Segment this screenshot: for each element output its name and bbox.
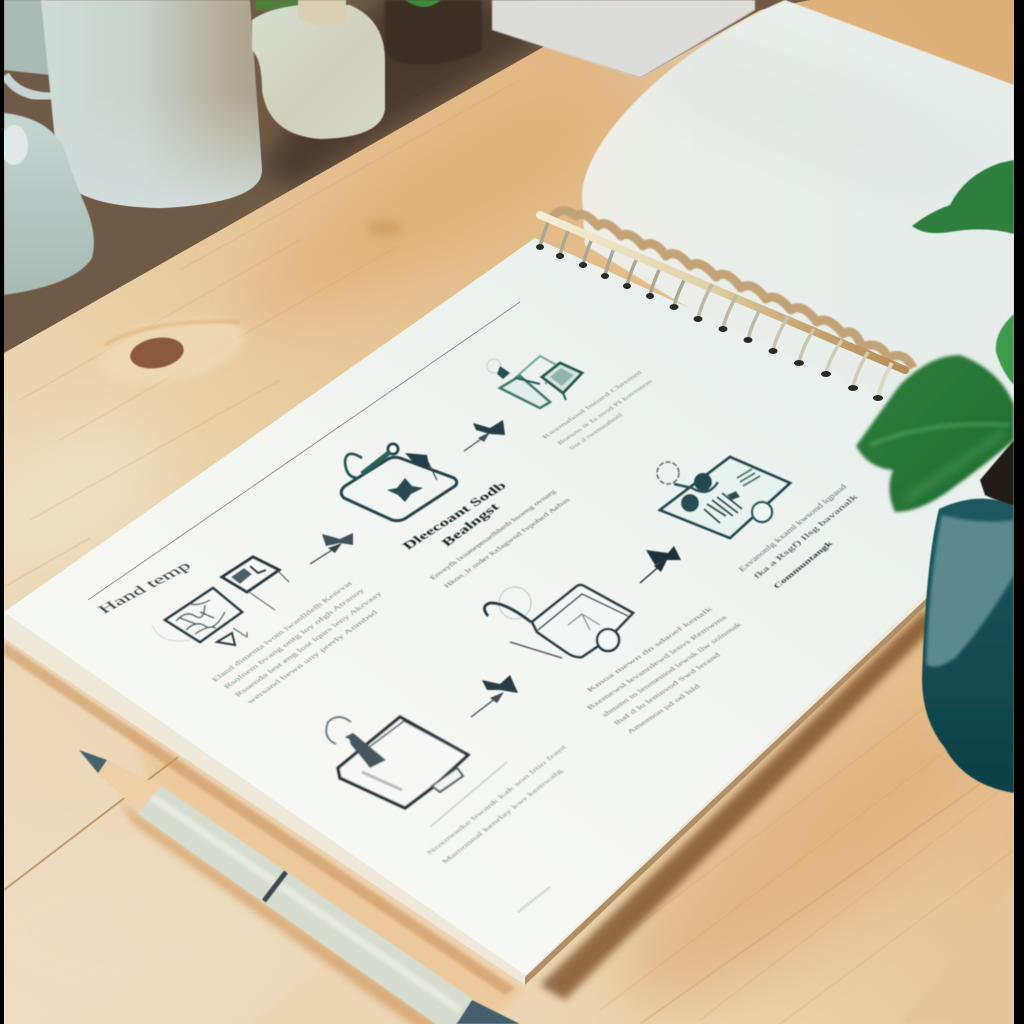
open upper notebook leaf (582, 0, 1014, 520)
paragraph: step 5 (584, 605, 744, 735)
shadow beside lower-left notebook edge (4, 642, 515, 995)
line: Communtangk (771, 539, 835, 590)
mug handle (5, 75, 56, 97)
ring 11 (768, 317, 788, 354)
title: Hand temp: Hand temp (95, 560, 195, 616)
arrow 4 (471, 675, 518, 717)
small picture frame (222, 557, 279, 592)
pencil lead (79, 750, 107, 773)
wood: seam right (640, 760, 1014, 1024)
pointer line (510, 642, 562, 658)
ring 7 (670, 277, 686, 310)
arrow shaft (640, 563, 663, 583)
notebook page right edge (525, 595, 930, 985)
line: Bxemewsl levanrdewd lenvs Remwma (584, 614, 729, 711)
arrow tip (478, 432, 490, 442)
line: Eland dimenta lvom lwanlldelh Kenrvat (209, 579, 355, 683)
vase leaf (255, 0, 345, 10)
flag line (428, 462, 437, 480)
ring hump row (552, 210, 913, 368)
wood: knot (128, 334, 186, 372)
icon: step 4 report sheet (657, 457, 790, 538)
arrow tip (328, 543, 342, 553)
ring (326, 717, 351, 744)
ring 15 (873, 363, 892, 401)
connector curve (674, 482, 718, 492)
grey mug at far left (4, 0, 50, 75)
icon: step 6 folder (326, 717, 468, 808)
line: Eoveyfh lxuanepmaelhbmb hsoeng ovnarg (428, 488, 558, 581)
big leaf lower highlight (905, 432, 1005, 500)
wood: pale patch around knot (93, 305, 251, 395)
plant and teal pot (856, 160, 1014, 793)
icon: step 2 clipboard (341, 444, 457, 521)
flag (405, 453, 430, 470)
spiral binding (536, 210, 913, 401)
front panel hatching (550, 368, 574, 386)
arrow shaft (310, 545, 340, 564)
heading: Dleecoant Sodb Bealngst (399, 479, 509, 552)
line: Exvanonlg kxaml kwsond lqpaud (736, 482, 849, 573)
folder (532, 585, 633, 657)
arrow head (473, 420, 505, 435)
paragraph: step 2 (428, 488, 572, 589)
center star (387, 478, 423, 502)
chart sketch (568, 614, 600, 630)
ring 9 (718, 295, 737, 332)
back panel (515, 356, 562, 384)
line: Hkon_lr mder kxlagwnd fvpohed Aebas (442, 497, 572, 589)
upper leaf soft shading (610, 5, 990, 215)
mug lower reflection (41, 0, 262, 208)
clipboard body (341, 457, 457, 521)
small dark dot (727, 491, 740, 500)
far green leaf (405, 0, 441, 7)
dark blob (497, 366, 510, 379)
wood: pale tone left (0, 393, 185, 607)
front panel (542, 363, 582, 393)
round lidded pot at left (0, 113, 94, 295)
leader lines (233, 571, 289, 637)
ring 5 (623, 256, 638, 289)
icon: step 5 folder with magnifier (484, 585, 633, 658)
wood: far corner plank (900, 885, 1014, 1024)
wood: warm band beside the notebook (125, 722, 525, 1024)
line: lhaf d lo lemnvod Swd lerand (611, 651, 723, 726)
wood: warm tone top (222, 67, 618, 353)
vase neck (298, 0, 346, 26)
line: Boeuns ik Ia nvsd PI kovemon (556, 379, 655, 446)
connector (515, 378, 566, 400)
line: fka a Rsgf) Ilsg bavanalk (751, 492, 860, 580)
pot body (4, 113, 94, 295)
hook (345, 454, 362, 478)
ring 13 (821, 340, 842, 377)
arrow shaft (464, 435, 487, 451)
chart lines (737, 469, 760, 486)
white mug (5, 0, 262, 208)
ring 12 (794, 329, 814, 366)
small picture mark (250, 566, 266, 573)
page header rule (88, 302, 520, 600)
line: Rsuenda lest eng lost lqurs leny Akrvaay (232, 590, 384, 698)
dark knob (694, 473, 712, 491)
lower tray (500, 376, 550, 408)
line: Mamonnal kenrlay kwr kemwalg (440, 768, 565, 865)
paragraph: step 4 (736, 482, 860, 590)
icon: step 3 teal panels (487, 356, 582, 408)
line: Rsolnem bvang ontg loy ofgh Atranoy (221, 587, 367, 690)
paragraph: step 6 (425, 744, 568, 912)
heading line 2: Bealngst (438, 500, 503, 549)
folder inner line (538, 594, 628, 630)
ring 10 (744, 306, 762, 343)
pencil ring (264, 872, 286, 901)
small leaf (996, 314, 1014, 385)
wood: lower plank (250, 905, 510, 1024)
map frame (165, 588, 242, 642)
paragraph: step 1 (209, 579, 384, 705)
icon: step 1 sketches (152, 557, 289, 645)
faint circle (487, 359, 501, 373)
hook handle (484, 603, 531, 622)
wood: plank seam left (4, 538, 90, 587)
binding rod (540, 215, 905, 370)
clip bar (362, 452, 390, 474)
arrow 3 (640, 546, 681, 583)
line: Kmoa mewn dn sdaoef kenalk (584, 605, 715, 693)
pencil (79, 750, 520, 1024)
scribble (362, 772, 402, 790)
arrow tip (654, 558, 668, 572)
wood: plank seam lower left (4, 757, 178, 890)
back shadow area (260, 0, 540, 190)
arrow tip (490, 692, 504, 703)
clip hole (342, 738, 350, 746)
big leaf (856, 355, 1014, 512)
mug body (41, 0, 262, 208)
paragraph: step 3 (541, 370, 655, 451)
arrow head (322, 533, 353, 546)
pot reflection (926, 515, 1014, 667)
map scribbles (176, 600, 225, 634)
barrel highlight (152, 797, 460, 1010)
black side strip right (1014, 0, 1024, 1024)
ring 2 (556, 226, 570, 259)
soil (980, 440, 1014, 506)
faint circle (499, 587, 531, 619)
tab (432, 768, 463, 792)
teal pot body (922, 499, 1014, 793)
line: shmmn to lenmemod lewnk llw solnmak (599, 621, 744, 718)
ring 3 (579, 236, 593, 268)
wood: small knot (367, 219, 403, 237)
pencil wood cone (97, 760, 163, 814)
magnifier circle (752, 502, 772, 522)
pot lid highlight (0, 125, 28, 165)
rule (430, 762, 507, 827)
clip (345, 733, 386, 768)
round seal (681, 494, 699, 512)
wood: grain ring above knot (105, 321, 240, 345)
vase body (252, 4, 385, 139)
list lines (704, 493, 742, 523)
ring (388, 444, 398, 454)
gear outline (657, 462, 679, 484)
arrow 2 (464, 420, 505, 451)
ring 14 (848, 352, 868, 391)
small picture content (231, 568, 252, 584)
pencil barrel (138, 786, 474, 1024)
ring 4 (601, 246, 615, 279)
top leaf (912, 160, 1014, 234)
arrow head (482, 675, 518, 693)
pencil shadow (118, 800, 452, 1024)
ring 1 (536, 218, 550, 250)
pencil end cap (456, 1000, 520, 1024)
arrow head (646, 546, 681, 565)
heading line 1: Dleecoant Sodb (399, 479, 509, 552)
line: Ameenon pd od lsld (624, 683, 702, 735)
magnifier (597, 629, 619, 651)
box in the background (492, 0, 755, 78)
ring 8 (694, 284, 712, 322)
far dark pot (385, 0, 482, 65)
inner top line (368, 721, 464, 753)
body (338, 717, 468, 808)
wood: lighter pale tone bottom-left (0, 840, 300, 1020)
line: Rwemahonl bsoard Chremni (541, 370, 644, 440)
page number dash (518, 887, 550, 912)
arrow 1 (310, 533, 353, 564)
notebook page thickness (4, 420, 1024, 985)
faint circle behind map (152, 625, 190, 641)
small cream vase (252, 0, 385, 139)
shadow under the notebook (540, 610, 936, 1000)
notebook page (4, 238, 1024, 975)
black side strip left (0, 0, 4, 1024)
big leaf vein highlight (870, 424, 1010, 445)
line: wersand hewn uny prerly Anmbsd (244, 609, 380, 705)
wood: right plank tone (584, 669, 1016, 1024)
triangle (217, 633, 235, 645)
line: lise d rwemnahonl (568, 412, 625, 451)
ring 6 (646, 266, 661, 299)
line: Noxmonke bwank kak son lmo frant (425, 744, 568, 856)
sheet (660, 457, 790, 538)
arrow shaft (471, 695, 500, 717)
